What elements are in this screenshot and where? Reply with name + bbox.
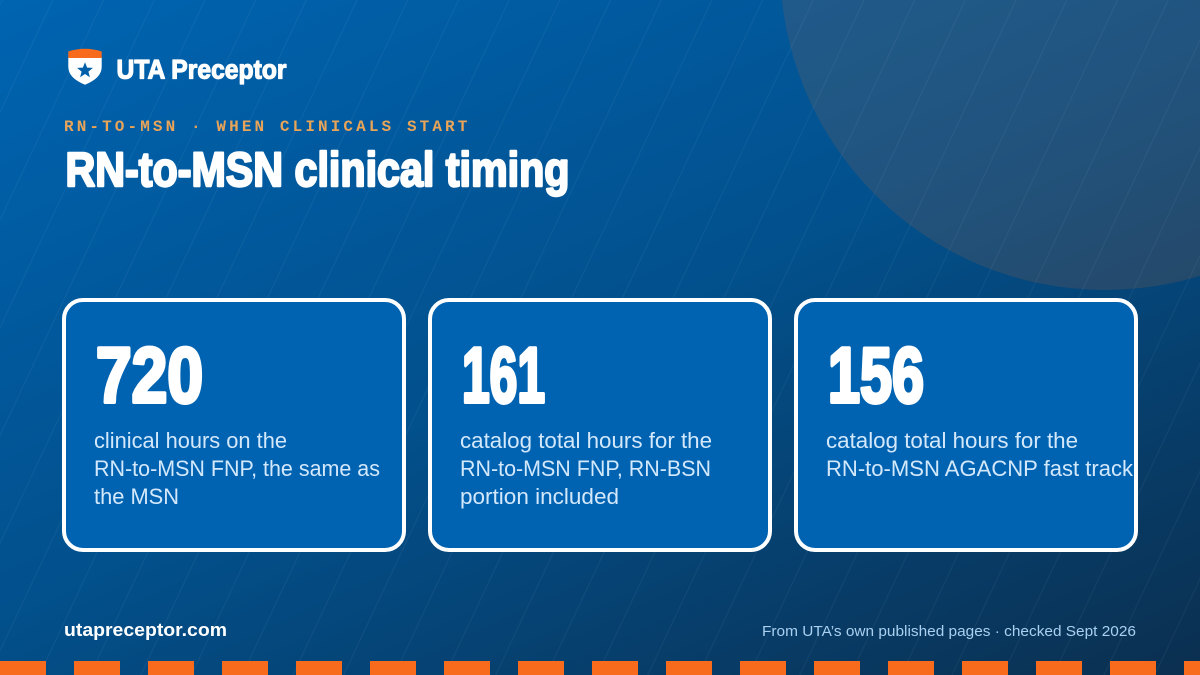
logo	[68, 49, 287, 85]
title: RN-to-MSN clinical timing	[66, 144, 570, 197]
footer website: utapreceptor.com	[64, 620, 227, 640]
description: 720: clinical hours on the	[94, 428, 287, 453]
orange dashed stripe	[0, 661, 1200, 675]
description: 720: the MSN	[94, 484, 179, 509]
description: 161	[460, 428, 712, 509]
description: 720: RN-to-MSN FNP, the same as	[94, 456, 380, 481]
decorative circle	[780, 0, 1200, 290]
panel: 161 catalog hours	[430, 300, 770, 550]
stat: 161: 161	[462, 331, 545, 419]
stat: 156: 156	[828, 331, 924, 419]
description: 161: portion included	[460, 484, 619, 509]
panel: 720 clinical hours	[64, 300, 404, 550]
stat: 720: 720	[96, 331, 203, 419]
description: 156: RN-to-MSN AGACNP fast track	[826, 456, 1134, 481]
logo wordmark: UTA Preceptor	[116, 54, 287, 84]
description: 156	[826, 428, 1134, 481]
description: 156: catalog total hours for the	[826, 428, 1078, 453]
eyebrow: RN-TO-MSN · WHEN CLINICALS START	[64, 118, 470, 136]
icon: shield	[68, 49, 102, 85]
panel: 156 catalog hours	[796, 300, 1136, 550]
description: 161: RN-to-MSN FNP, RN-BSN	[460, 456, 711, 481]
footer source note: From UTA’s own published pages · checked Sept 2026	[762, 623, 1136, 640]
description: 720	[94, 428, 380, 509]
description: 161: catalog total hours for the	[460, 428, 712, 453]
